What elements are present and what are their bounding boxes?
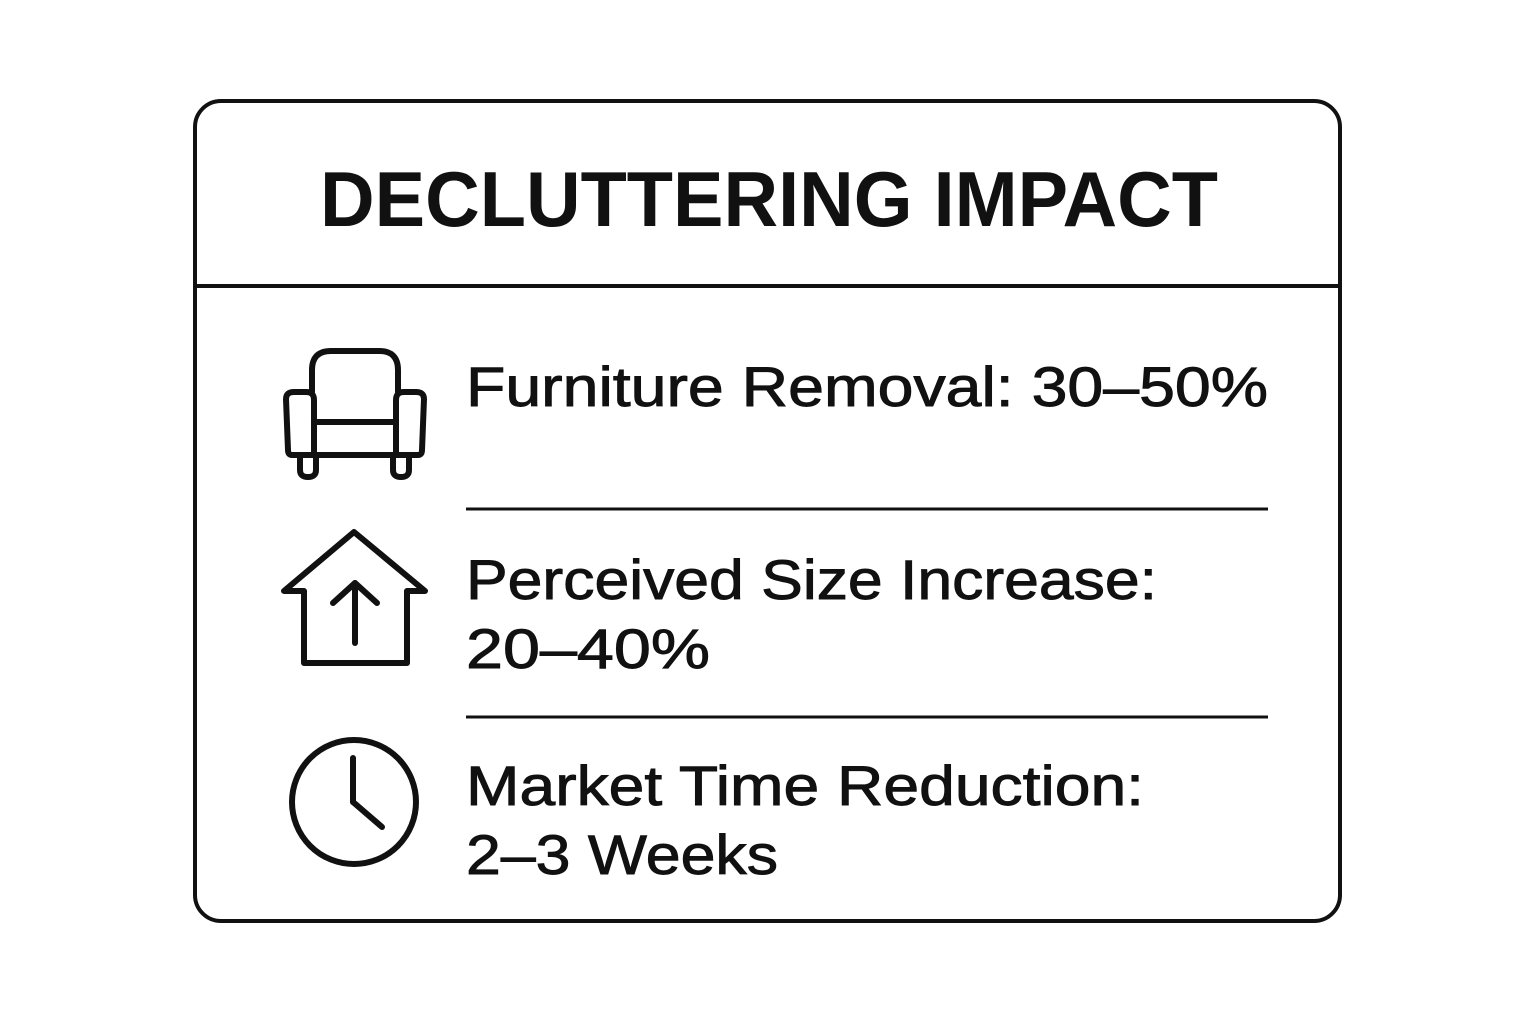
panel: card <box>195 101 1340 921</box>
text: perceived size increase: Perceived Size Increase: <box>466 548 1157 611</box>
text: market time reduction: 2–3 Weeks <box>466 823 778 886</box>
text: market time reduction <box>466 754 1144 886</box>
icon: house with up arrow <box>284 532 425 663</box>
icon: armchair <box>286 351 424 477</box>
icon: clock <box>292 740 416 864</box>
title: DECLUTTERING IMPACT <box>320 155 1218 243</box>
text: furniture removal: Furniture Removal: 30–50% <box>466 355 1268 418</box>
text: perceived size increase: 20–40% <box>466 617 710 680</box>
text: perceived size increase <box>466 548 1157 680</box>
text: market time reduction: Market Time Reduction: <box>466 754 1144 817</box>
